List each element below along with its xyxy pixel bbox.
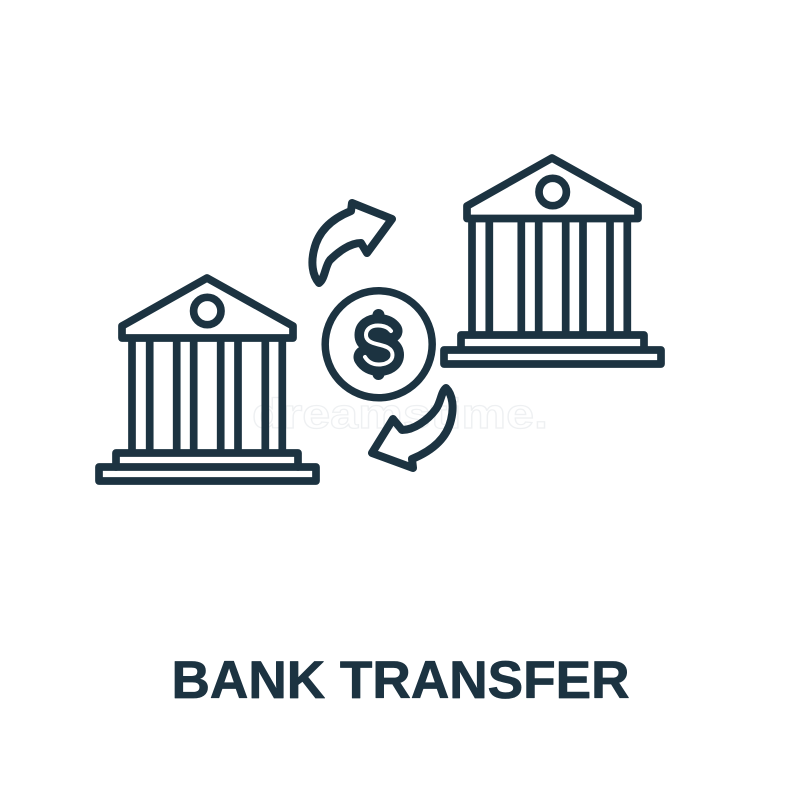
left bank roof medallion <box>194 297 221 325</box>
coin ring <box>325 291 432 398</box>
watermark: dreamstime. <box>252 390 548 437</box>
right bank columns <box>472 218 627 335</box>
right bank lower step <box>444 350 661 364</box>
dollar sign <box>365 315 392 374</box>
title: BANK TRANSFER <box>172 651 630 710</box>
right bank upper step <box>461 335 644 349</box>
icon: left bank building <box>99 278 316 481</box>
left bank lower step <box>99 467 316 481</box>
left bank roof <box>122 278 293 338</box>
arrow: upward transfer <box>312 203 392 283</box>
right bank roof <box>467 158 638 218</box>
icon: dollar coin <box>325 291 432 398</box>
left bank columns <box>132 338 282 453</box>
arrow: downward transfer <box>372 388 453 468</box>
right bank roof medallion <box>539 178 566 206</box>
left bank upper step <box>116 453 298 467</box>
icon: right bank building <box>444 158 661 364</box>
